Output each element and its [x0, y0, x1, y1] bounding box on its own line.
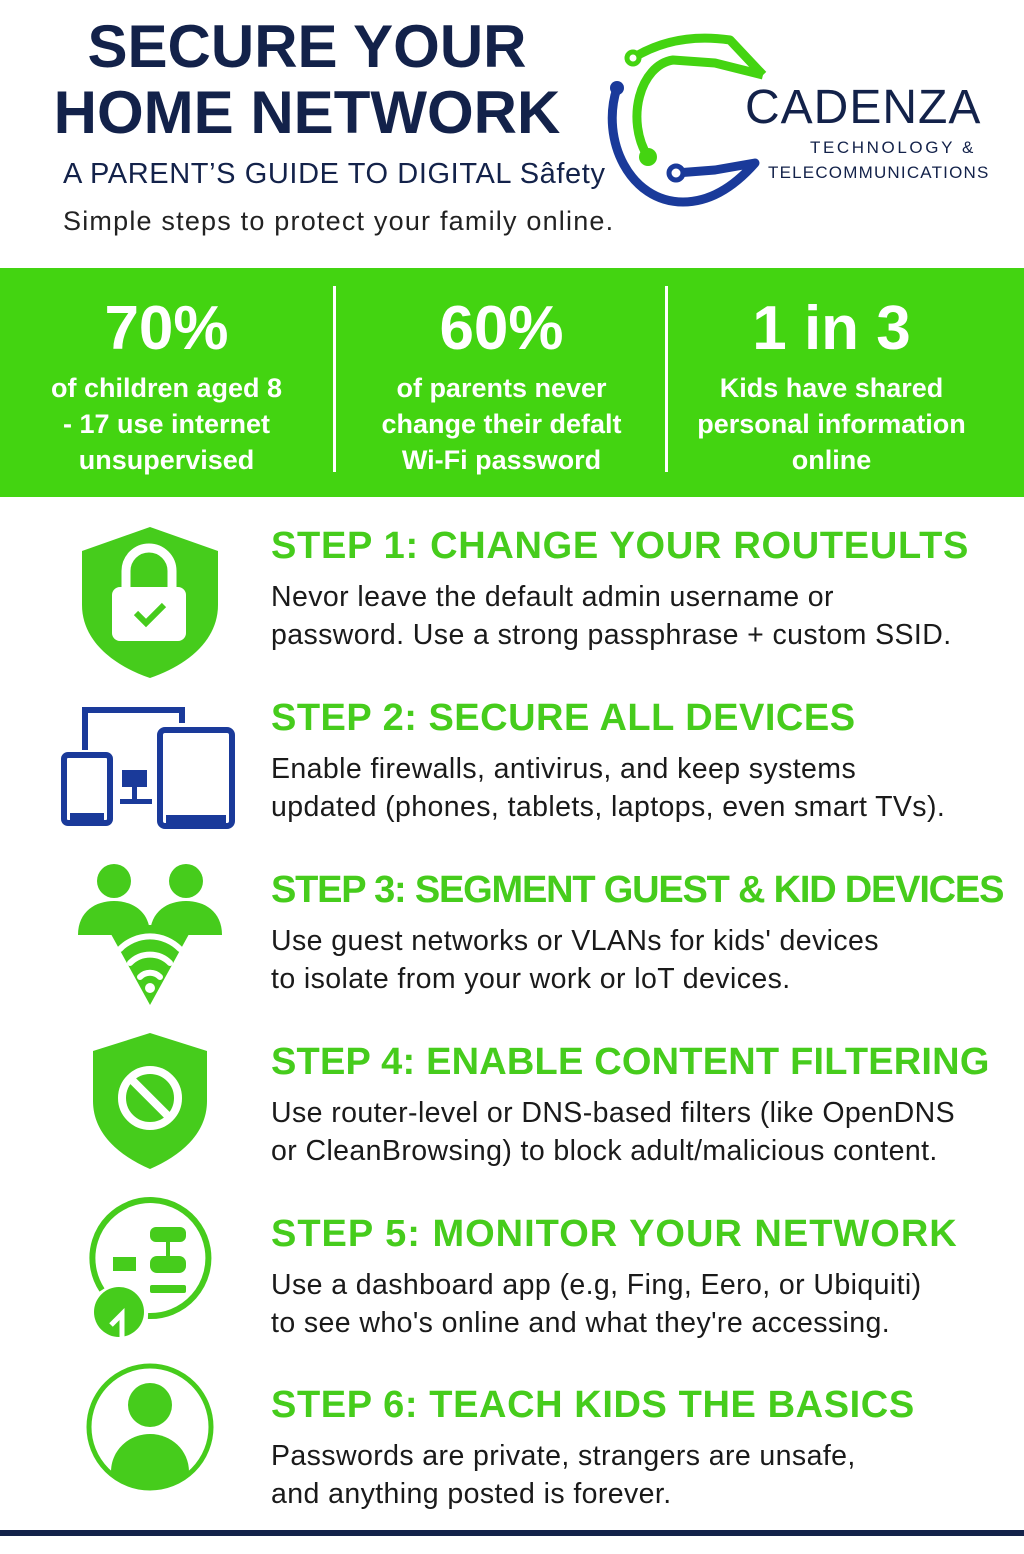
- step 4: [93, 1033, 990, 1169]
- step 3: [78, 864, 1003, 1005]
- stat 2: [381, 294, 622, 475]
- step 1: Nevor leave the default admin username or: [271, 581, 834, 613]
- subtitle: A PARENT’S GUIDE TO DIGITAL Sâfety: [63, 158, 606, 190]
- icon: user circle: [86, 1364, 214, 1490]
- stats band: [0, 268, 1024, 497]
- stat 3: personal information: [697, 409, 966, 439]
- tagline: Simple steps to protect your family online.: [63, 206, 614, 236]
- stat 2: 60%: [439, 294, 564, 363]
- stat 1: of children aged 8: [51, 373, 282, 403]
- step 6: STEP 6: TEACH KIDS THE BASICS: [271, 1384, 915, 1426]
- title: SECURE YOUR: [88, 13, 526, 80]
- step 3: to isolate from your work or loT devices.: [271, 963, 791, 995]
- step 4: or CleanBrowsing) to block adult/malicious content.: [271, 1135, 938, 1167]
- stat 2: Wi-Fi password: [402, 445, 601, 475]
- step 5: Use a dashboard app (e.g, Fing, Eero, or Ubiquiti): [271, 1269, 922, 1301]
- logo wordmark: CADENZA: [745, 81, 981, 134]
- icon: monitor dashboard: [89, 1197, 212, 1337]
- step 6: and anything posted is forever.: [271, 1478, 672, 1510]
- icon: logo C: [608, 34, 766, 206]
- title: HOME NETWORK: [54, 79, 560, 146]
- stat 3: online: [792, 445, 871, 475]
- logo: [608, 34, 990, 206]
- step 2: STEP 2: SECURE ALL DEVICES: [271, 697, 856, 739]
- step 3: STEP 3: SEGMENT GUEST & KID DEVICES: [271, 869, 1003, 911]
- stat 1: [51, 294, 282, 475]
- stat 3: Kids have shared: [720, 373, 943, 403]
- logo: TELECOMMUNICATIONS: [768, 163, 990, 182]
- icon: devices: [61, 707, 235, 829]
- icon: shield lock: [82, 527, 218, 678]
- stat 3: [697, 294, 966, 475]
- step 4: STEP 4: ENABLE CONTENT FILTERING: [271, 1041, 990, 1083]
- step 5: to see who's online and what they're accessing.: [271, 1307, 890, 1339]
- step 2: [61, 697, 945, 829]
- step 4: Use router-level or DNS-based filters (like OpenDNS: [271, 1097, 955, 1129]
- icon: users wifi: [78, 864, 222, 1005]
- bottom bar: [0, 1530, 1024, 1536]
- stat 2: change their defalt: [381, 409, 622, 439]
- logo: TECHNOLOGY &: [810, 138, 976, 157]
- step 3: Use guest networks or VLANs for kids' devices: [271, 925, 879, 957]
- step 6: Passwords are private, strangers are unsafe,: [271, 1440, 856, 1472]
- step 5: STEP 5: MONITOR YOUR NETWORK: [271, 1213, 958, 1255]
- step 1: STEP 1: CHANGE YOUR ROUTEULTS: [271, 525, 969, 567]
- stat 3: 1 in 3: [752, 294, 911, 363]
- title: [54, 13, 560, 146]
- icon: shield block: [93, 1033, 207, 1169]
- step 2: updated (phones, tablets, laptops, even smart TVs).: [271, 791, 945, 823]
- step 5: [89, 1197, 958, 1339]
- stat 2: of parents never: [396, 373, 607, 403]
- stat 1: unsupervised: [79, 445, 254, 475]
- step 1: [82, 525, 969, 678]
- stat 1: 70%: [104, 294, 229, 363]
- step 6: [86, 1364, 915, 1510]
- step 2: Enable firewalls, antivirus, and keep systems: [271, 753, 856, 785]
- step 1: password. Use a strong passphrase + custom SSID.: [271, 619, 952, 651]
- stat 1: - 17 use internet: [63, 409, 270, 439]
